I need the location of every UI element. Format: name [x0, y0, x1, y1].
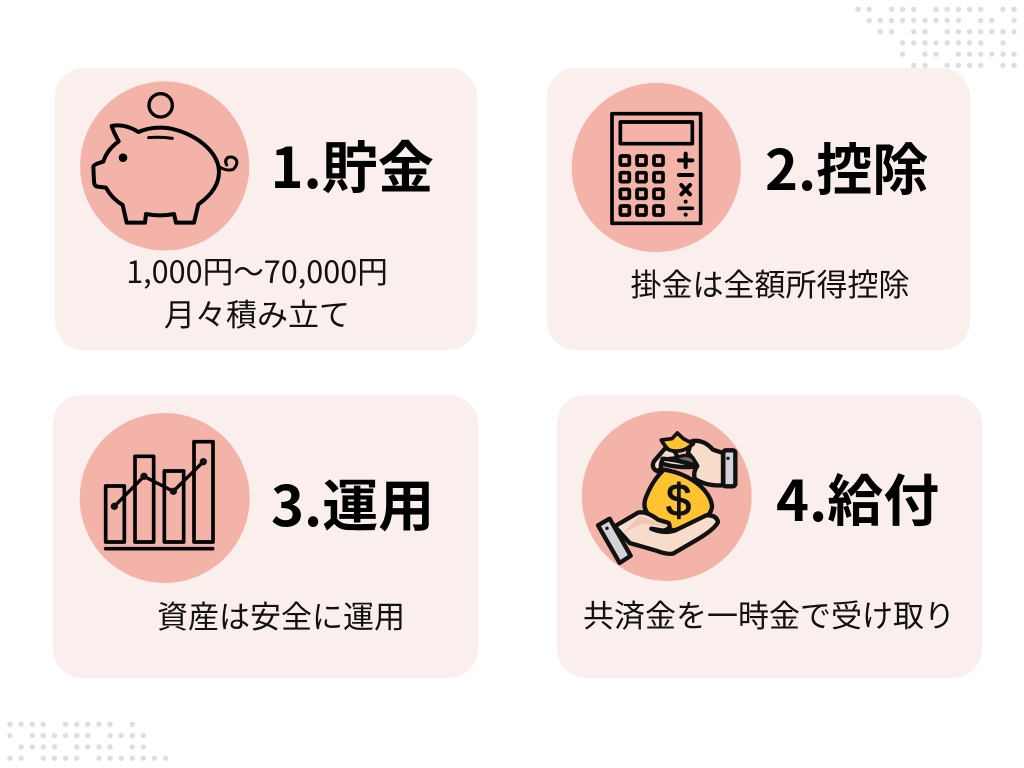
icon: hands exchanging money bag: $ [666, 474, 691, 525]
text: lump-sum benefit: 共済金を一時金で受け取り [583, 591, 955, 636]
text: monthly contribution [126, 248, 388, 335]
heading: 2.控除: 2.控除 [765, 126, 928, 207]
dot pattern: top right [855, 7, 1017, 68]
panel: 4 benefit [557, 395, 982, 678]
heading: 1.貯金: 1.貯金 [270, 124, 434, 205]
icon: calculator [572, 83, 741, 252]
heading: 3.運用: 3.運用 [271, 462, 434, 543]
icon: piggy bank [80, 81, 249, 251]
text: safe investment of assets: 資産は安全に運用 [157, 592, 405, 637]
heading: 4.給付: 4.給付 [776, 457, 939, 538]
icon: hands exchanging money bag [582, 411, 752, 581]
panel: 1 savings [55, 68, 477, 350]
text: premiums fully deductible: 掛金は全額所得控除 [630, 260, 910, 305]
icon: bar and line chart [80, 413, 250, 583]
dot pattern: bottom left [7, 722, 168, 761]
text: monthly contribution: 月々積み立て [164, 290, 350, 335]
panel: 3 investment [53, 395, 478, 678]
text: monthly contribution: 1,000円〜70,000円 [126, 248, 388, 292]
panel: 2 deduction [547, 68, 970, 350]
